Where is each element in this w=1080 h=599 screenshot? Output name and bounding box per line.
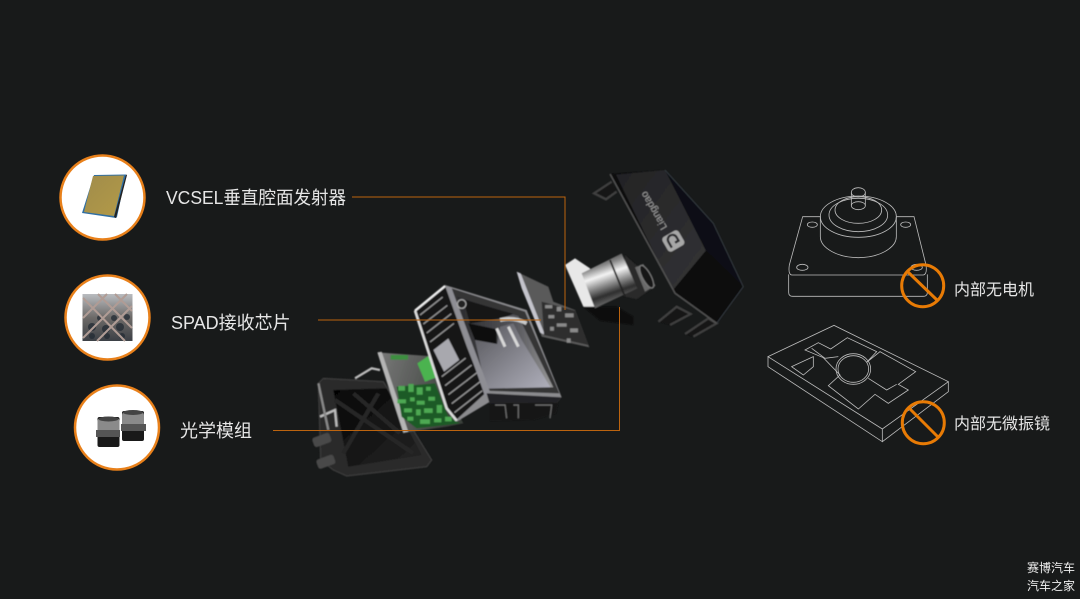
label: SPAD: SPAD接收芯片	[171, 313, 291, 333]
rear cover	[311, 368, 432, 476]
icon: optical lenses	[75, 386, 159, 470]
watermark: 赛博汽车	[1027, 560, 1075, 575]
logo mark	[661, 229, 686, 253]
SPAD board	[517, 272, 589, 347]
front housing	[594, 170, 743, 337]
icon: no motor	[902, 265, 944, 307]
label: no MEMS mirror: 内部无微振镜	[954, 414, 1050, 433]
label: optical module: 光学模组	[180, 421, 252, 441]
label: VCSEL: VCSEL垂直腔面发射器	[166, 188, 346, 208]
green circuit board	[377, 352, 463, 433]
leader lines	[273, 197, 620, 430]
line drawing: motor	[789, 188, 927, 296]
label: no motor: 内部无电机	[954, 281, 1034, 299]
lens module	[565, 253, 656, 325]
icon: no MEMS mirror	[902, 402, 944, 444]
watermark	[1027, 560, 1075, 593]
icon: VCSEL chip	[60, 156, 144, 240]
aluminum heat sink housing	[414, 285, 562, 422]
line drawing: MEMS mirror	[768, 325, 948, 442]
watermark: 汽车之家	[1027, 578, 1075, 593]
icon: SPAD array	[66, 276, 150, 360]
logo wordmark: Liangdao	[639, 189, 670, 231]
exploded lidar device	[311, 170, 743, 476]
